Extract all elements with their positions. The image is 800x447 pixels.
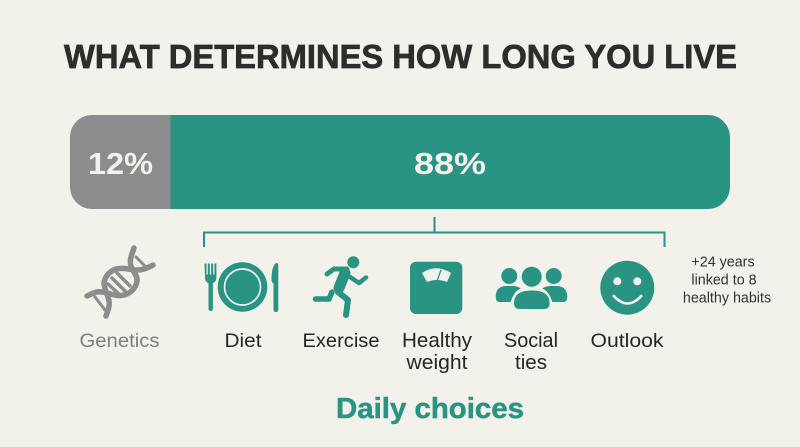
icon: DNA	[87, 248, 153, 316]
icon: people	[496, 267, 567, 309]
label: 88%: 88%	[414, 146, 486, 181]
label: Social ties	[504, 330, 558, 374]
note: +24 years: linked to 8	[691, 272, 757, 288]
title: WHAT DETERMINES HOW LONG YOU LIVE	[64, 38, 737, 75]
icon: plate and cutlery	[204, 262, 278, 312]
label: Exercise: Exercise	[302, 331, 380, 352]
label: Social ties: ties	[515, 352, 547, 374]
note: +24 years: healthy habits	[683, 290, 771, 306]
note: +24 years	[683, 254, 771, 306]
knife	[272, 263, 278, 312]
label: 12%: 12%	[88, 146, 153, 181]
fork	[204, 264, 216, 311]
bar segment: genetics 12%	[70, 115, 170, 209]
note: +24 years: +24 years	[691, 254, 755, 270]
icon: scale	[410, 262, 462, 314]
label: Social ties: Social	[504, 330, 558, 352]
plate	[218, 262, 267, 312]
label: Healthy weight: Healthy	[402, 330, 472, 352]
label: Diet: Diet	[224, 331, 262, 352]
stacked bar	[70, 115, 730, 209]
bar segment: daily choices 88%	[170, 115, 730, 209]
icon: smiley	[600, 261, 654, 315]
label: Healthy weight	[402, 330, 472, 374]
bracket	[204, 217, 664, 247]
label: Outlook: Outlook	[590, 331, 664, 352]
label: Daily choices: Daily choices	[336, 393, 524, 425]
icon: runner	[316, 256, 366, 315]
label: Genetics: Genetics	[80, 331, 160, 352]
label: Healthy weight: weight	[405, 352, 468, 374]
